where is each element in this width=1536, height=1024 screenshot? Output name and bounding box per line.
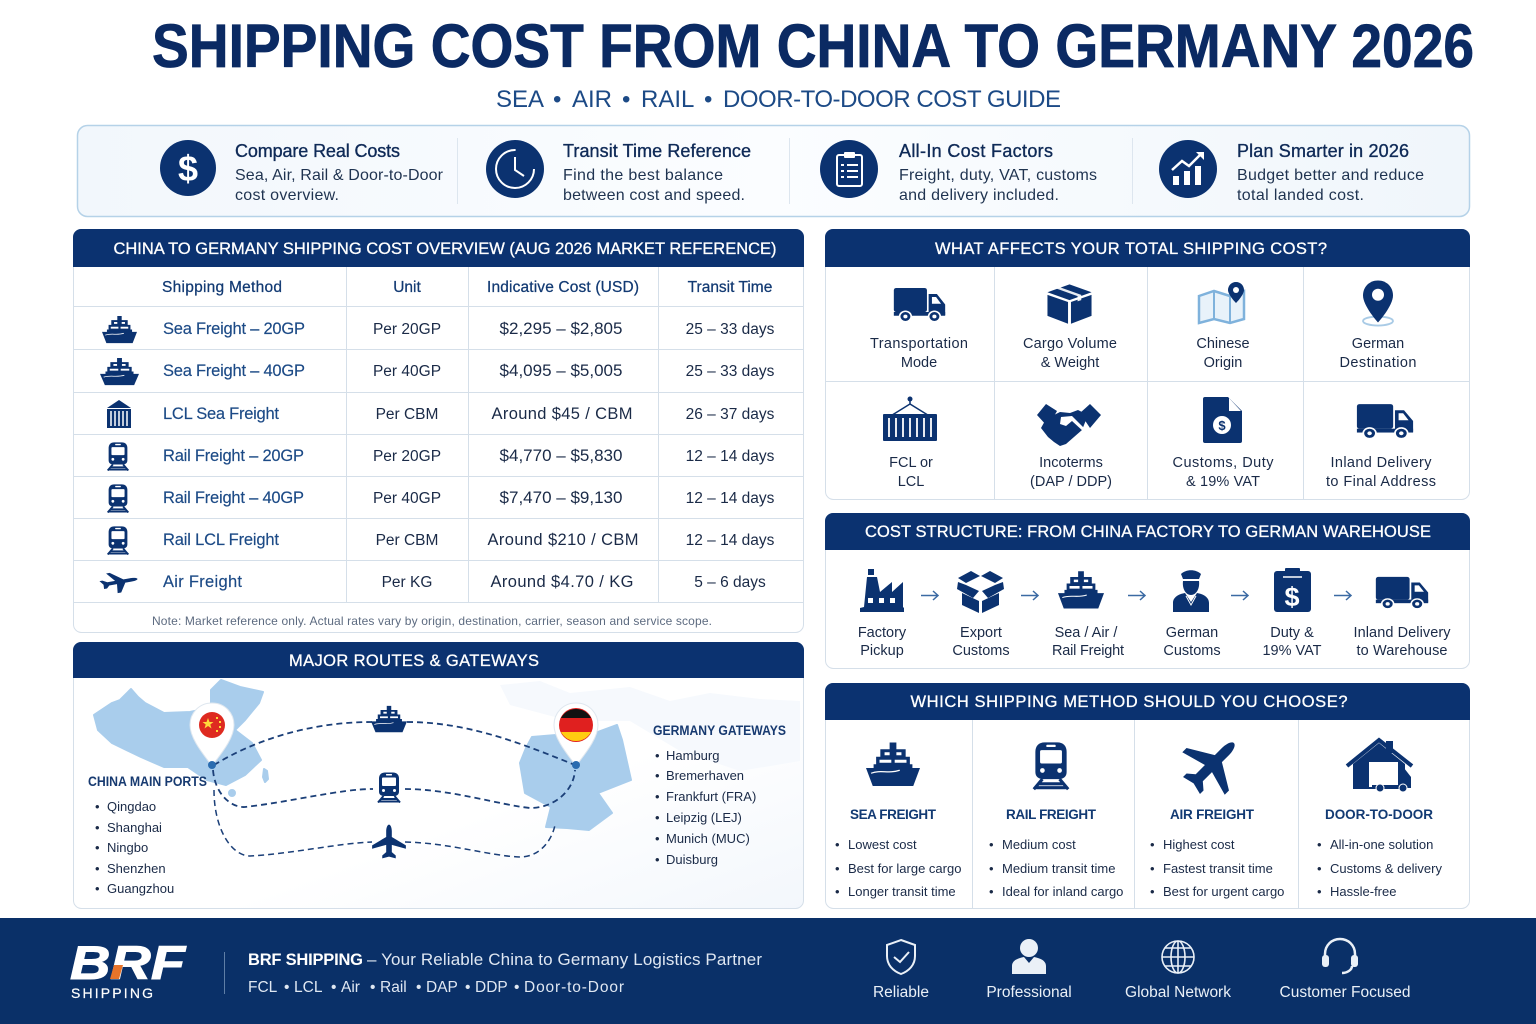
method: air freight: Highest cost: [1163, 837, 1235, 852]
Germany gateways list: Bremerhaven: [666, 768, 744, 783]
footer tagline: •: [331, 979, 336, 996]
routes heading: MAJOR ROUTES & GATEWAYS: [289, 652, 539, 670]
Germany gateways list: Duisburg: [666, 852, 718, 867]
method: rail freight: RAIL FREIGHT: [1006, 807, 1097, 822]
row: sea freight 40GP: $4,095 – $5,005: [500, 361, 622, 380]
benefit: transit time: between cost and speed.: [563, 187, 745, 204]
China main ports list: Qingdao: [107, 799, 156, 814]
method: door-to-door: •: [1317, 861, 1322, 876]
step: export customs: Export: [960, 625, 1002, 641]
method: air freight: •: [1150, 861, 1155, 876]
method: sea freight: [835, 742, 961, 899]
step: inland delivery: [1354, 577, 1451, 659]
row: rail LCL freight: Per CBM: [376, 532, 438, 549]
factor: FCL or LCL: [883, 396, 937, 490]
footer tagline: DDP: [475, 979, 508, 996]
row: rail freight 40GP: [108, 484, 775, 513]
factor: customs duty and VAT: $: [1218, 418, 1226, 433]
pin: Germany flag: [554, 703, 598, 769]
cost structure heading: [825, 513, 1470, 550]
row: rail LCL freight: [108, 526, 775, 555]
panel: cost overview table: [73, 229, 804, 632]
badge: customer focused: [1280, 939, 1410, 1001]
row: sea freight 20GP: $2,295 – $2,805: [500, 319, 622, 338]
row: air freight: 5 – 6 days: [694, 574, 766, 591]
footer tagline: •: [465, 979, 470, 996]
factor: customs duty and VAT: Customs, Duty: [1172, 455, 1274, 471]
panel: which shipping method: [825, 683, 1470, 909]
China main ports list: •: [95, 840, 100, 855]
footer tagline: Rail: [380, 979, 407, 996]
footer tagline: [248, 950, 762, 996]
footer tagline: Air: [341, 979, 360, 996]
benefit: all-in cost factors: All-In Cost Factors: [899, 141, 1053, 161]
row: rail freight 20GP: $4,770 – $5,830: [500, 446, 622, 465]
factor: customs duty and VAT: & 19% VAT: [1186, 474, 1260, 490]
subtitle: DOOR-TO-DOOR COST GUIDE: [723, 86, 1061, 113]
step: export customs: Customs: [952, 643, 1010, 659]
footer tagline: BRF SHIPPING: [248, 951, 363, 969]
step: duty and VAT: [1262, 568, 1322, 659]
footer tagline: Door-to-Door: [524, 979, 624, 996]
Germany gateways list: •: [655, 852, 660, 867]
method: door-to-door: Hassle-free: [1330, 884, 1396, 899]
row: sea freight 20GP: 25 – 33 days: [686, 321, 775, 338]
factor: Incoterms: (DAP / DDP): [1030, 474, 1112, 490]
pin: China flag: [190, 703, 234, 769]
panel: major routes and gateways: [73, 642, 804, 908]
method: sea freight: •: [835, 884, 840, 899]
factor: German destination: German: [1352, 336, 1404, 352]
method: door-to-door: DOOR-TO-DOOR: [1325, 807, 1433, 822]
badge: global network: [1125, 941, 1231, 1001]
step: inland delivery: Inland Delivery: [1354, 625, 1451, 641]
badge: customer focused: Customer Focused: [1280, 984, 1410, 1001]
method: rail freight: Medium transit time: [1002, 861, 1115, 876]
row: rail freight 40GP: $7,470 – $9,130: [500, 488, 622, 507]
step: factory pickup: Factory: [858, 625, 907, 641]
benefit: all-in cost factors: Freight, duty, VAT, customs: [899, 167, 1097, 184]
method: rail freight: Medium cost: [1002, 837, 1076, 852]
table heading: [73, 229, 804, 267]
step: freight: Sea / Air /: [1055, 625, 1118, 641]
China main ports list: CHINA MAIN PORTS: [88, 774, 207, 789]
row: LCL sea freight: 26 – 37 days: [686, 406, 775, 423]
BRF logo: SHIPPING: [71, 985, 153, 1001]
method: sea freight: •: [835, 861, 840, 876]
row: rail freight 20GP: Per 20GP: [373, 448, 441, 465]
footer tagline: FCL: [248, 979, 278, 996]
subtitle: SEA: [496, 86, 544, 113]
Germany gateways list: •: [655, 831, 660, 846]
footer tagline: – Your Reliable China to Germany Logistics Partner: [367, 950, 762, 969]
panel: cost structure: [825, 513, 1470, 668]
factor: FCL or LCL: FCL or: [889, 455, 933, 471]
benefit: transit time: Transit Time Reference: [563, 141, 751, 161]
row: rail freight 40GP: Per 40GP: [373, 490, 441, 507]
Germany gateways list: •: [655, 810, 660, 825]
benefit: plan smarter: Plan Smarter in 2026: [1237, 141, 1409, 161]
factor: German destination: Destination: [1340, 355, 1416, 371]
row: LCL sea freight: LCL Sea Freight: [163, 405, 279, 423]
footer tagline: •: [416, 979, 421, 996]
step: duty and VAT: $: [1284, 582, 1300, 612]
subtitle: AIR: [572, 86, 612, 113]
icon: route ship: [371, 706, 407, 732]
Germany gateways list: •: [655, 748, 660, 763]
benefit: plan smarter: [1159, 140, 1424, 204]
row: sea freight 40GP: 25 – 33 days: [686, 363, 775, 380]
factor: Chinese origin: [1196, 282, 1250, 371]
benefit: plan smarter: Budget better and reduce: [1237, 167, 1424, 184]
Germany gateways list: •: [655, 768, 660, 783]
method: sea freight: Longer transit time: [848, 884, 956, 899]
factor: inland delivery: to Final Address: [1326, 474, 1436, 490]
row: LCL sea freight: Per CBM: [376, 406, 438, 423]
method: air freight: •: [1150, 837, 1155, 852]
row: rail freight 20GP: [108, 442, 775, 471]
footer tagline: •: [514, 979, 519, 996]
step: German customs: Customs: [1163, 643, 1221, 659]
factor: transportation mode: Transportation: [870, 336, 968, 352]
row: rail freight 20GP: Rail Freight – 20GP: [163, 447, 304, 465]
benefit: transit time: [486, 140, 751, 204]
China main ports list: •: [95, 881, 100, 896]
China main ports list: Guangzhou: [107, 881, 174, 896]
method: sea freight: •: [835, 837, 840, 852]
China main ports list: •: [95, 861, 100, 876]
method: door-to-door: All-in-one solution: [1330, 837, 1433, 852]
arrow: [1334, 591, 1351, 600]
which method heading: [825, 683, 1470, 720]
factor: Incoterms: Incoterms: [1039, 455, 1103, 471]
benefit: all-in cost factors: [820, 140, 1097, 204]
step: German customs: German: [1166, 625, 1218, 641]
table column headers: Transit Time: [688, 279, 772, 296]
row: rail freight 40GP: 12 – 14 days: [686, 490, 775, 507]
step: German customs: [1163, 570, 1221, 659]
affects heading: WHAT AFFECTS YOUR TOTAL SHIPPING COST?: [935, 240, 1327, 258]
arrow: [1021, 591, 1038, 600]
table note: Note: Market reference only. Actual rates vary by origin, destination, carrier, season and service scope.: [152, 614, 712, 628]
routes heading: [73, 642, 804, 678]
factor: FCL or LCL: LCL: [898, 474, 924, 490]
cost structure heading: COST STRUCTURE: FROM CHINA FACTORY TO GERMAN WAREHOUSE: [865, 523, 1431, 541]
Germany gateways list: Frankfurt (FRA): [666, 789, 756, 804]
row: rail freight 40GP: Rail Freight – 40GP: [163, 489, 304, 507]
method: sea freight: SEA FREIGHT: [850, 807, 937, 822]
factor: Chinese origin: Origin: [1204, 355, 1242, 371]
method: door-to-door: [1317, 740, 1442, 899]
row: air freight: Per KG: [382, 574, 432, 591]
table column headers: Unit: [393, 279, 421, 296]
method: sea freight: Best for large cargo: [848, 861, 961, 876]
benefit: compare real costs: cost overview.: [235, 187, 339, 204]
footer tagline: •: [370, 979, 375, 996]
step: freight: Rail Freight: [1052, 643, 1124, 659]
China main ports list: [88, 774, 207, 896]
row: sea freight 20GP: [102, 316, 775, 343]
subtitle: RAIL: [641, 86, 694, 113]
factor: cargo volume and weight: & Weight: [1041, 355, 1099, 371]
row: rail LCL freight: 12 – 14 days: [686, 532, 775, 549]
Germany gateways list: Leipzig (LEJ): [666, 810, 742, 825]
footer band: [0, 918, 1536, 1024]
row: rail LCL freight: Around $210 / CBM: [488, 531, 638, 549]
factor: transportation mode: Mode: [901, 355, 937, 371]
footer tagline: LCL: [294, 979, 323, 996]
BRF logo: [70, 936, 187, 1001]
row: sea freight 40GP: Sea Freight – 40GP: [163, 362, 305, 380]
step: factory pickup: [858, 569, 907, 659]
row: air freight: [96, 569, 766, 595]
subtitle: •: [704, 86, 712, 113]
routes: dashed lines: [213, 722, 575, 857]
badge: professional: Professional: [986, 984, 1072, 1001]
subtitle: •: [553, 86, 561, 113]
step: inland delivery: to Warehouse: [1356, 643, 1448, 659]
method: air freight: Fastest transit time: [1163, 861, 1273, 876]
panel: benefits strip: [78, 126, 1470, 216]
method: rail freight: •: [989, 837, 994, 852]
benefit: compare real costs: Compare Real Costs: [235, 141, 400, 161]
row: sea freight 40GP: [100, 358, 775, 385]
China main ports list: •: [95, 820, 100, 835]
row: sea freight 40GP: Per 40GP: [373, 363, 441, 380]
factor: cargo volume and weight: Cargo Volume: [1023, 336, 1117, 352]
row: air freight: Air Freight: [163, 573, 242, 591]
Germany gateways list: •: [655, 789, 660, 804]
step: export customs: [952, 571, 1010, 659]
method: door-to-door: •: [1317, 837, 1322, 852]
method: air freight: [1150, 722, 1284, 899]
factor: inland delivery: [1326, 404, 1436, 490]
method: door-to-door: Customs & delivery: [1330, 861, 1442, 876]
BRF logo: BRF: [70, 936, 187, 989]
China main ports list: •: [95, 799, 100, 814]
method: rail freight: Ideal for inland cargo: [1002, 884, 1123, 899]
row: air freight: Around $4.70 / KG: [490, 573, 634, 591]
Germany gateways list: GERMANY GATEWAYS: [653, 723, 786, 738]
benefit: compare real costs: [160, 140, 444, 204]
step: duty and VAT: Duty &: [1270, 625, 1314, 641]
China main ports list: Shenzhen: [107, 861, 166, 876]
footer tagline: •: [284, 979, 289, 996]
step: freight: [1052, 571, 1124, 659]
badge: professional: [986, 939, 1072, 1001]
row: rail LCL freight: Rail LCL Freight: [163, 531, 279, 549]
Germany gateways list: Munich (MUC): [666, 831, 750, 846]
Germany gateways list: Hamburg: [666, 748, 719, 763]
factor: German destination: [1340, 280, 1416, 371]
benefit: compare real costs: Sea, Air, Rail & Door-to-Door: [235, 167, 444, 184]
table column headers: Shipping Method: [162, 279, 282, 296]
badge: global network: Global Network: [1125, 984, 1231, 1001]
method: sea freight: Lowest cost: [848, 837, 917, 852]
badge: reliable: Reliable: [873, 984, 929, 1001]
map: China: [94, 680, 268, 796]
row: sea freight 20GP: Per 20GP: [373, 321, 441, 338]
factor: cargo volume and weight: [1023, 284, 1117, 371]
footer tagline: DAP: [426, 979, 458, 996]
subtitle: •: [622, 86, 630, 113]
method: air freight: Best for urgent cargo: [1163, 884, 1284, 899]
method: door-to-door: •: [1317, 884, 1322, 899]
table column headers: [162, 279, 772, 296]
benefit: transit time: Find the best balance: [563, 167, 723, 184]
method: air freight: AIR FREIGHT: [1170, 807, 1255, 822]
icon: route train: [378, 772, 400, 802]
factor: Incoterms: [1030, 404, 1112, 490]
method: rail freight: [989, 742, 1123, 899]
benefit: compare real costs: $: [178, 148, 198, 189]
row: LCL sea freight: Around $45 / CBM: [492, 405, 632, 423]
method: air freight: •: [1150, 884, 1155, 899]
row: rail freight 20GP: 12 – 14 days: [686, 448, 775, 465]
benefit: all-in cost factors: and delivery included.: [899, 187, 1059, 204]
step: factory pickup: Pickup: [860, 643, 904, 659]
arrow: [1231, 591, 1248, 600]
benefit: plan smarter: total landed cost.: [1237, 187, 1364, 204]
Germany gateways list: [653, 723, 786, 867]
table column headers: Indicative Cost (USD): [487, 279, 639, 296]
factor: inland delivery: Inland Delivery: [1330, 455, 1432, 471]
row: sea freight 20GP: Sea Freight – 20GP: [163, 320, 305, 338]
step: duty and VAT: 19% VAT: [1262, 643, 1322, 659]
factor: customs duty and VAT: [1172, 397, 1274, 490]
panel: what affects total shipping cost: [825, 229, 1470, 500]
which method heading: WHICH SHIPPING METHOD SHOULD YOU CHOOSE?: [910, 693, 1348, 711]
affects heading: [825, 229, 1470, 267]
row: LCL sea freight: [107, 400, 775, 428]
China main ports list: Shanghai: [107, 820, 162, 835]
arrow: [921, 591, 938, 600]
table heading: CHINA TO GERMANY SHIPPING COST OVERVIEW (AUG 2026 MARKET REFERENCE): [114, 240, 776, 258]
factor: transportation mode: [870, 288, 968, 371]
map: Germany: [520, 725, 631, 830]
arrow: [1128, 591, 1145, 600]
badge: reliable: [873, 940, 929, 1001]
icon: route plane: [372, 825, 406, 858]
method: rail freight: •: [989, 884, 994, 899]
factor: Chinese origin: Chinese: [1196, 336, 1250, 352]
China main ports list: Ningbo: [107, 840, 148, 855]
method: rail freight: •: [989, 861, 994, 876]
